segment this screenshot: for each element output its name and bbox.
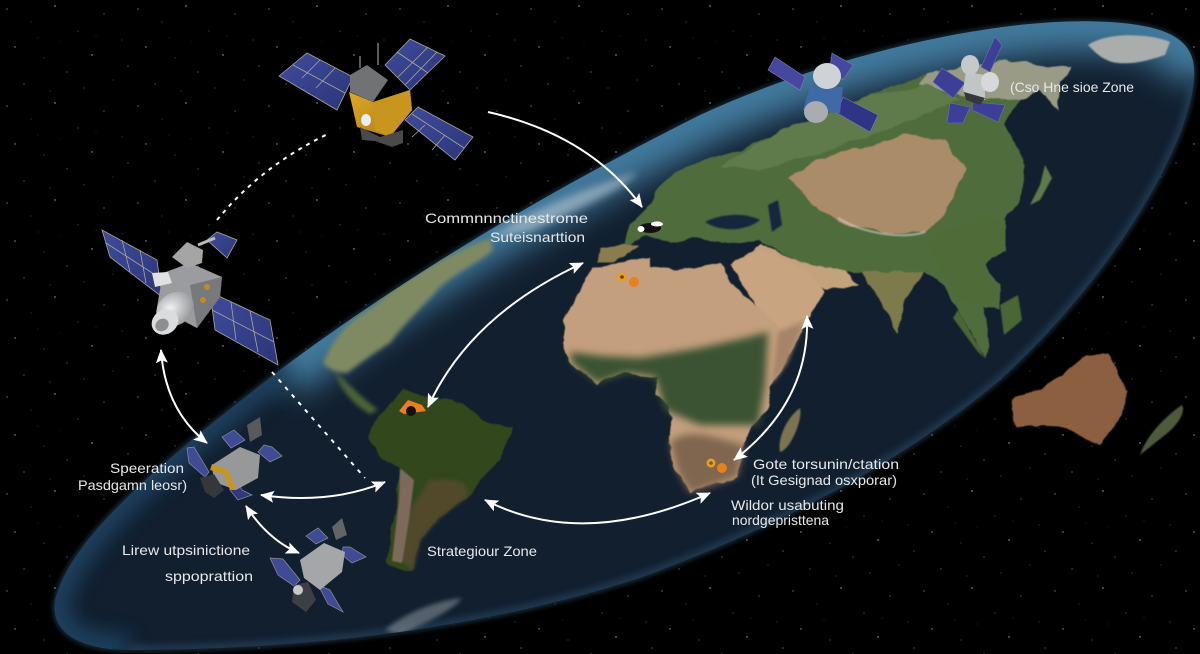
- land: africa: [563, 257, 807, 493]
- satellite: top right B: [933, 37, 1005, 123]
- label: right widor: nordgepristtena: [732, 512, 829, 528]
- land: arabia: [730, 264, 825, 329]
- land: north-east cap: [1088, 35, 1170, 63]
- land: indonesia: [952, 294, 1022, 358]
- land: northern taiga tint: [720, 85, 960, 170]
- gold fittings: [204, 284, 210, 290]
- label: right gate: (It Gesignad osxporar): [751, 472, 897, 488]
- upper rim haze: [280, 21, 1194, 370]
- dishes: [961, 55, 979, 75]
- land: north america: [323, 238, 493, 414]
- land: japan: [1030, 165, 1052, 205]
- base: [964, 92, 985, 105]
- land: siberian north tint: [920, 60, 1073, 110]
- nozzle highlight: [293, 585, 303, 595]
- satellite: lower small: [270, 518, 366, 612]
- land: antarctica: [385, 598, 462, 635]
- satellite: middle small: [187, 417, 282, 500]
- label: left separation: Pasdgamn leosr): [78, 477, 187, 493]
- bus: [157, 263, 222, 328]
- label: lower left: sppoprattion: [165, 568, 253, 584]
- solar panels: [187, 430, 282, 500]
- arrow: top satellite to europe: [488, 112, 642, 207]
- label: strategic zone: Strategiour Zone: [427, 543, 537, 559]
- solar panels: [102, 230, 278, 365]
- land: south america: [368, 390, 512, 570]
- label: lower left: Lirew utpsinictione: [122, 542, 250, 558]
- arrow: middle satellite to south america: [261, 482, 385, 498]
- label: left separation: [78, 460, 187, 493]
- gold bus: [349, 90, 412, 137]
- solar panels: [279, 39, 473, 160]
- lens: [361, 114, 371, 126]
- marker: amazon: [399, 400, 426, 416]
- label: left separation: Speeration: [110, 460, 184, 476]
- bus: [300, 543, 345, 590]
- satellite: top gold: [279, 39, 473, 160]
- land: india: [860, 272, 925, 333]
- arrow: middle to lower satellite: [246, 506, 299, 553]
- bus: [963, 72, 985, 100]
- land: east africa tint: [772, 322, 804, 384]
- marker: southern africa: [706, 458, 727, 473]
- label: lower left: [122, 542, 253, 584]
- himalaya snow ridge: [838, 218, 925, 235]
- land: sahel green: [570, 332, 768, 425]
- solar panels: [933, 37, 1005, 123]
- caspian sea: [768, 200, 782, 232]
- bottom rim haze: [130, 80, 1194, 650]
- label: communications: Suteisnarttion: [490, 229, 585, 245]
- land: southern africa: [670, 434, 745, 493]
- left rim haze: [54, 370, 280, 650]
- thruster nozzle: [149, 284, 201, 334]
- solar panels: [768, 53, 878, 132]
- arrow: horn of africa to south africa: [734, 316, 807, 460]
- dashed link: upper satellites: [217, 133, 330, 220]
- label: top right zone: (Cso Hne sioe Zone: [1010, 79, 1134, 95]
- nozzle: [804, 101, 828, 123]
- land: madagascar: [779, 408, 800, 452]
- clouds over the north atlantic: [490, 172, 637, 238]
- label: right widor: Wildor usabuting: [731, 497, 844, 513]
- label: communications: Commnnnctinestrome: [425, 210, 588, 226]
- arrow: africa to south america: [428, 263, 583, 407]
- arrow: south america to south africa: [485, 493, 710, 523]
- panel arm: [198, 238, 215, 245]
- label: right widor: [731, 497, 844, 528]
- white clamp: [152, 272, 172, 287]
- dashed link: left satellite to south america: [272, 372, 365, 478]
- dark nozzle: [200, 474, 224, 498]
- top box: [172, 242, 203, 268]
- label: right gate: Gote torsunin/ctation: [753, 456, 899, 472]
- land: middle east: [730, 243, 860, 288]
- label: communications: [425, 210, 588, 245]
- land: central america: [335, 372, 378, 414]
- dark nozzle: [292, 582, 316, 612]
- land: australia: [1012, 354, 1130, 445]
- marker: north africa: [618, 272, 639, 287]
- satellite: top right A: [768, 53, 878, 132]
- land: iberia: [597, 243, 640, 262]
- land: southern cone tint: [400, 479, 467, 570]
- satellite: left silver: [102, 230, 278, 365]
- solar panels: [270, 528, 366, 612]
- antennas: [360, 43, 378, 68]
- bus: [803, 87, 843, 113]
- lower module: [360, 127, 403, 147]
- dish: [813, 63, 841, 89]
- arrow: left satellite to middle satellite: [161, 350, 207, 443]
- gray instrument box: [350, 65, 388, 102]
- land: eurasia: [597, 60, 1073, 358]
- marker: europe: [638, 222, 663, 233]
- land: andes fringe: [392, 468, 414, 563]
- land: south-east asia: [925, 215, 1005, 305]
- dish: [332, 518, 347, 540]
- dish: [247, 417, 262, 442]
- label: right gate: [751, 456, 899, 488]
- gold band: [210, 464, 236, 490]
- black sea: [705, 215, 760, 229]
- bus: [212, 447, 260, 490]
- land: new zealand: [1140, 405, 1183, 455]
- land: central asia plateau: [790, 135, 965, 232]
